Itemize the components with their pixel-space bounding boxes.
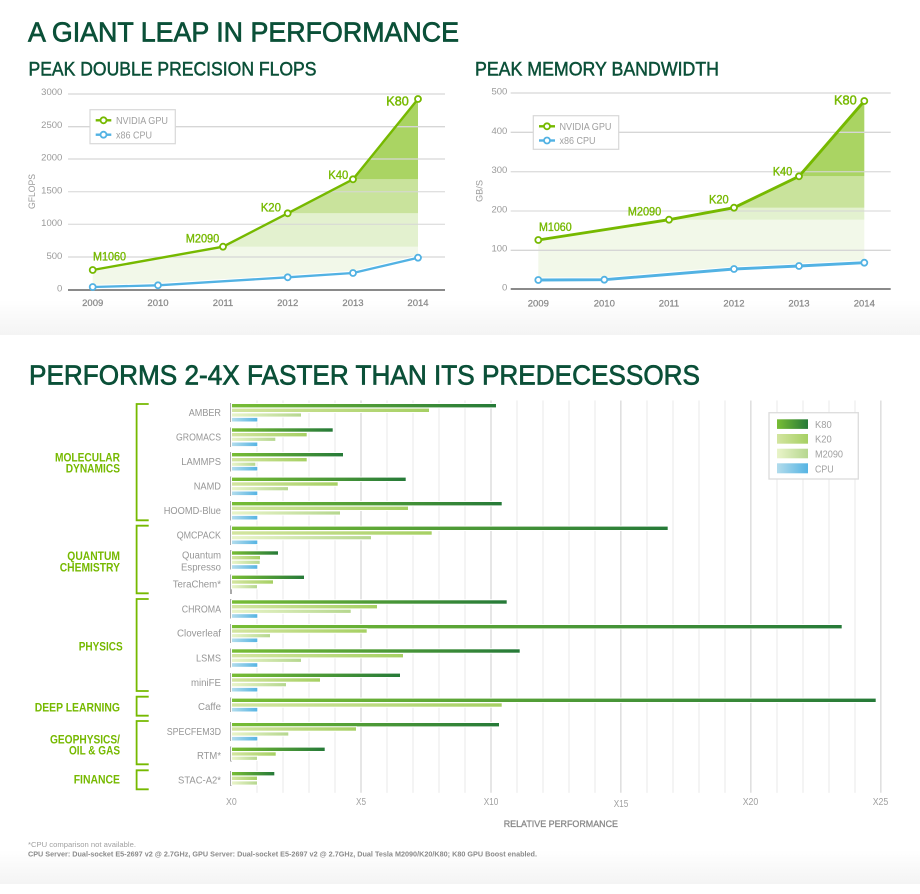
heading: bandwidth chart: PEAK MEMORY BANDWIDTH — [475, 58, 719, 80]
group: molecular dynamics — [55, 403, 502, 520]
bar chart x axis labels — [226, 797, 889, 810]
app row: Caffe — [198, 698, 876, 713]
bracket: finance — [137, 770, 149, 789]
bar chart x axis labels: X5 — [356, 797, 366, 808]
category label: quantum chemistry — [60, 551, 120, 574]
category label: geophysics — [50, 734, 121, 758]
bracket: molecular dynamics — [137, 404, 149, 520]
app row: miniFE: miniFE — [191, 678, 221, 689]
category label: quantum chemistry: QUANTUM — [67, 551, 120, 563]
bandwidth product labels: K20 — [709, 195, 729, 207]
flops y axis labels: 3000 — [41, 87, 62, 98]
category label: geophysics: GEOPHYSICS/ — [50, 734, 121, 746]
app row: LSMS — [196, 648, 520, 668]
bandwidth grid lines — [511, 93, 891, 289]
bandwidth y axis labels: 500 — [491, 86, 507, 97]
flops y axis title: GFLOPS — [27, 174, 38, 209]
bar chart x axis title: RELATIVE PERFORMANCE — [504, 819, 618, 829]
bandwidth area fill bands — [538, 101, 864, 280]
bar chart legend: CPU — [815, 464, 834, 476]
bar chart x axis labels: X20 — [743, 797, 759, 808]
category label: physics: PHYSICS — [79, 641, 123, 653]
footnote text — [28, 840, 537, 858]
flops y axis labels: 2000 — [41, 152, 62, 164]
bracket: physics — [137, 599, 149, 691]
app row: NAMD: NAMD — [194, 481, 221, 492]
app row: HOOMD-Blue: HOOMD-Blue — [164, 506, 221, 517]
flops x axis years: 2010 — [147, 298, 169, 309]
app row: Quantum Espresso: Quantum — [182, 551, 221, 562]
flops y axis labels: 1000 — [41, 218, 62, 229]
app row: Caffe: Caffe — [198, 702, 221, 713]
app row: RTM — [197, 746, 325, 762]
flops cpu line — [90, 255, 421, 290]
panel: peak double precision flops — [27, 59, 445, 309]
flops product labels: K20 — [261, 203, 281, 215]
app row: QMCPACK: QMCPACK — [177, 531, 221, 542]
group: finance — [74, 770, 149, 789]
app row: STAC-A2 — [178, 771, 274, 787]
group: quantum chemistry — [60, 526, 668, 594]
bandwidth product labels — [539, 92, 857, 234]
flops y axis labels: 2500 — [41, 120, 62, 131]
bandwidth cpu line — [535, 260, 867, 283]
bar chart legend: K80 — [815, 420, 832, 431]
flops product labels: M2090 — [186, 233, 219, 245]
flops gpu line — [90, 96, 421, 273]
app row: LAMMPS — [181, 452, 343, 472]
bandwidth y axis labels: 200 — [491, 204, 507, 216]
title: a giant leap in performance: A GIANT LEAP IN PERFORMANCE — [28, 16, 459, 47]
heading: flops chart: PEAK DOUBLE PRECISION FLOPS — [28, 59, 316, 81]
bar chart x axis labels: X25 — [873, 797, 889, 808]
bandwidth legend: NVIDIA GPU — [560, 122, 612, 133]
flops product labels — [93, 93, 409, 264]
bracket: geophysics — [137, 721, 149, 764]
bandwidth x axis years — [528, 299, 875, 310]
app row: QMCPACK — [177, 526, 668, 545]
bandwidth x axis years: 2010 — [594, 299, 615, 310]
bracket: deep learning — [137, 697, 149, 716]
bandwidth x axis years: 2014 — [854, 299, 875, 310]
flops x axis years: 2011 — [213, 298, 233, 309]
flops x axis years — [82, 298, 429, 309]
app row: SPECFEM3D — [167, 722, 499, 741]
flops product labels: K80 — [386, 93, 409, 108]
flops x axis years: 2013 — [342, 298, 364, 309]
bandwidth y axis labels: 400 — [491, 126, 507, 137]
flops area fill bands — [93, 99, 418, 287]
bandwidth product labels: K40 — [773, 167, 792, 179]
panel: peak memory bandwidth — [474, 58, 891, 310]
app row: Cloverleaf: Cloverleaf — [177, 629, 221, 640]
flops y axis labels — [41, 87, 62, 295]
app row: Quantum Espresso: Espresso — [181, 562, 221, 573]
app row: miniFE — [191, 673, 400, 692]
app row: LAMMPS: LAMMPS — [181, 457, 221, 468]
app row: HOOMD-Blue — [164, 501, 502, 520]
app row: GROMACS: GROMACS — [176, 432, 221, 443]
flops legend: x86 CPU — [116, 130, 152, 141]
app row: TeraChem: TeraChem* — [173, 579, 221, 590]
panel: relative performance bar chart — [35, 400, 889, 829]
flops x axis years: 2009 — [82, 298, 103, 309]
app row: CHROMA — [182, 599, 507, 618]
footnote text: *CPU comparison not available. — [28, 840, 136, 849]
flops legend — [90, 110, 175, 144]
title: performs 2-4x faster: PERFORMS 2-4X FASTER THAN ITS PREDECESSORS — [29, 360, 700, 390]
bandwidth product labels: M2090 — [628, 206, 661, 218]
category label: quantum chemistry: CHEMISTRY — [60, 562, 120, 574]
app row: STAC-A2: STAC-A2* — [178, 776, 221, 787]
app row: SPECFEM3D: SPECFEM3D — [167, 727, 221, 738]
app row: NAMD — [194, 476, 406, 496]
category label: molecular dynamics: DYNAMICS — [66, 464, 120, 476]
bandwidth y axis labels: 300 — [491, 165, 507, 176]
flops product labels: M1060 — [93, 252, 126, 264]
bandwidth legend: x86 CPU — [560, 136, 596, 147]
bandwidth product labels: K80 — [834, 92, 857, 107]
category label: geophysics: OIL & GAS — [69, 746, 120, 758]
bandwidth x axis years: 2009 — [528, 299, 549, 310]
category label: molecular dynamics — [55, 452, 121, 476]
bandwidth x axis years: 2012 — [723, 299, 745, 310]
app row: AMBER: AMBER — [189, 408, 221, 419]
bandwidth legend — [533, 116, 619, 149]
flops product labels: K40 — [328, 170, 348, 182]
bandwidth x axis years: 2013 — [788, 299, 810, 310]
bandwidth y axis labels — [491, 86, 507, 294]
flops y axis labels: 0 — [57, 284, 62, 295]
group: geophysics oil and gas — [50, 721, 499, 787]
flops x axis years: 2012 — [277, 298, 298, 309]
bar chart x axis labels: X0 — [226, 797, 237, 808]
bar chart legend: K20 — [815, 434, 832, 446]
flops x axis years: 2014 — [407, 298, 429, 309]
bandwidth gpu line — [535, 98, 867, 243]
bandwidth product labels: M1060 — [539, 222, 572, 234]
flops grid lines — [68, 94, 445, 290]
app row: Cloverleaf — [177, 624, 842, 643]
category label: deep learning: DEEP LEARNING — [35, 702, 120, 714]
bracket: quantum chemistry — [137, 526, 149, 593]
app row: LSMS: LSMS — [196, 653, 221, 664]
category label: molecular dynamics: MOLECULAR — [55, 452, 121, 464]
bandwidth x axis years: 2011 — [659, 299, 679, 310]
bar chart legend — [769, 413, 858, 479]
app row: AMBER — [189, 403, 496, 422]
group: deep learning — [35, 697, 876, 716]
flops y axis labels: 500 — [46, 251, 62, 262]
category label: finance: FINANCE — [74, 775, 120, 787]
app row: CHROMA: CHROMA — [182, 604, 221, 615]
app row: RTM: RTM* — [197, 751, 221, 762]
bar chart x axis labels: X10 — [484, 797, 499, 808]
bandwidth y axis title: GB/S — [474, 180, 485, 202]
bar chart vertical grid lines — [257, 400, 881, 793]
app row: GROMACS — [176, 428, 333, 447]
bar chart legend: M2090 — [815, 449, 843, 460]
app row: TeraChem — [173, 574, 304, 594]
bar chart x axis labels: X15 — [614, 799, 629, 810]
bandwidth y axis labels: 100 — [491, 244, 507, 254]
app row: Quantum Espresso — [181, 550, 278, 573]
footnote text: CPU Server: Dual-socket E5-2697 v2 @ 2.7GHz, GPU Server: Dual-socket E5-2697 v2 @ 2.7GHz, Dual Tesla M2090/K20/K80; K80 GPU Boost enabled. — [28, 849, 537, 858]
group: physics — [79, 599, 842, 692]
bandwidth y axis labels: 0 — [502, 283, 507, 294]
flops legend: NVIDIA GPU — [116, 116, 168, 127]
flops y axis labels: 1500 — [41, 186, 62, 196]
